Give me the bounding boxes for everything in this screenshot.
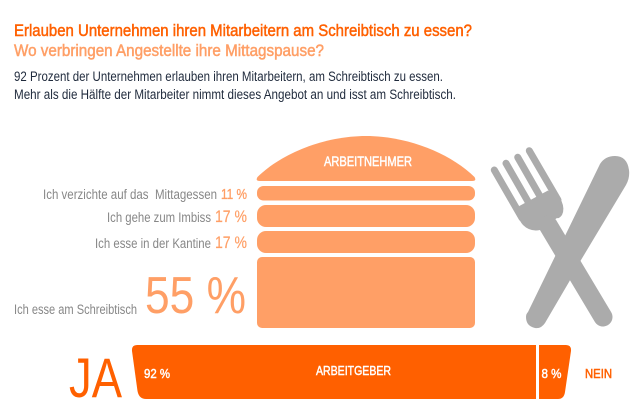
burger layer 11 %: [257, 186, 475, 200]
burger layer 17 % snack bar: [257, 205, 475, 227]
label: JA: JA: [69, 346, 123, 409]
row label: snack bar 17 %: [107, 207, 247, 226]
burger chart: [257, 136, 475, 328]
label: NEIN: NEIN: [585, 366, 612, 381]
employer bar: no 8 %: [539, 345, 571, 399]
employer bar: yes 92 %: ARBEITGEBER: [316, 363, 391, 378]
top bun: employees: ARBEITNEHMER: [324, 154, 412, 169]
employer bar: no 8 %: 8 %: [542, 367, 562, 381]
fork: [494, 151, 603, 317]
icon: fork and knife: [494, 151, 629, 328]
employer bar: yes 92 %: [132, 345, 536, 399]
top bun: employees: [257, 136, 475, 181]
intro text: Mehr als die Hälfte der Mitarbeiter nimmt dieses Angebot an und isst am Schreibtisch.: [14, 87, 456, 102]
row label: at desk 55 %: Ich esse am Schreibtisch: [14, 302, 137, 317]
title: Erlauben Unternehmen ihren Mitarbeitern am Schreibtisch zu essen?: [14, 21, 472, 40]
row label: no lunch 11 %: Ich verzichte auf das Mittagessen: [43, 187, 217, 202]
row label: snack bar 17 %: 17 %: [215, 207, 247, 226]
row label: at desk 55 %: 55 %: [145, 267, 246, 325]
row label: canteen 17 %: 17 %: [215, 233, 247, 252]
row label: at desk 55 %: [14, 267, 246, 325]
knife: [526, 156, 629, 328]
subtitle: Wo verbringen Angestellte ihre Mittagspause?: [14, 41, 324, 60]
employer bar: yes 92 %: 92 %: [144, 367, 170, 381]
row label: snack bar 17 %: Ich gehe zum Imbiss: [107, 210, 211, 225]
row label: canteen 17 %: Ich esse in der Kantine: [95, 236, 211, 251]
row label: no lunch 11 %: 11 %: [221, 187, 247, 203]
intro text: [14, 69, 456, 102]
burger layer 55 %: [257, 257, 475, 328]
burger layer 17 % canteen: [257, 231, 475, 253]
intro text: 92 Prozent der Unternehmen erlauben ihren Mitarbeitern, am Schreibtisch zu essen.: [14, 69, 443, 84]
